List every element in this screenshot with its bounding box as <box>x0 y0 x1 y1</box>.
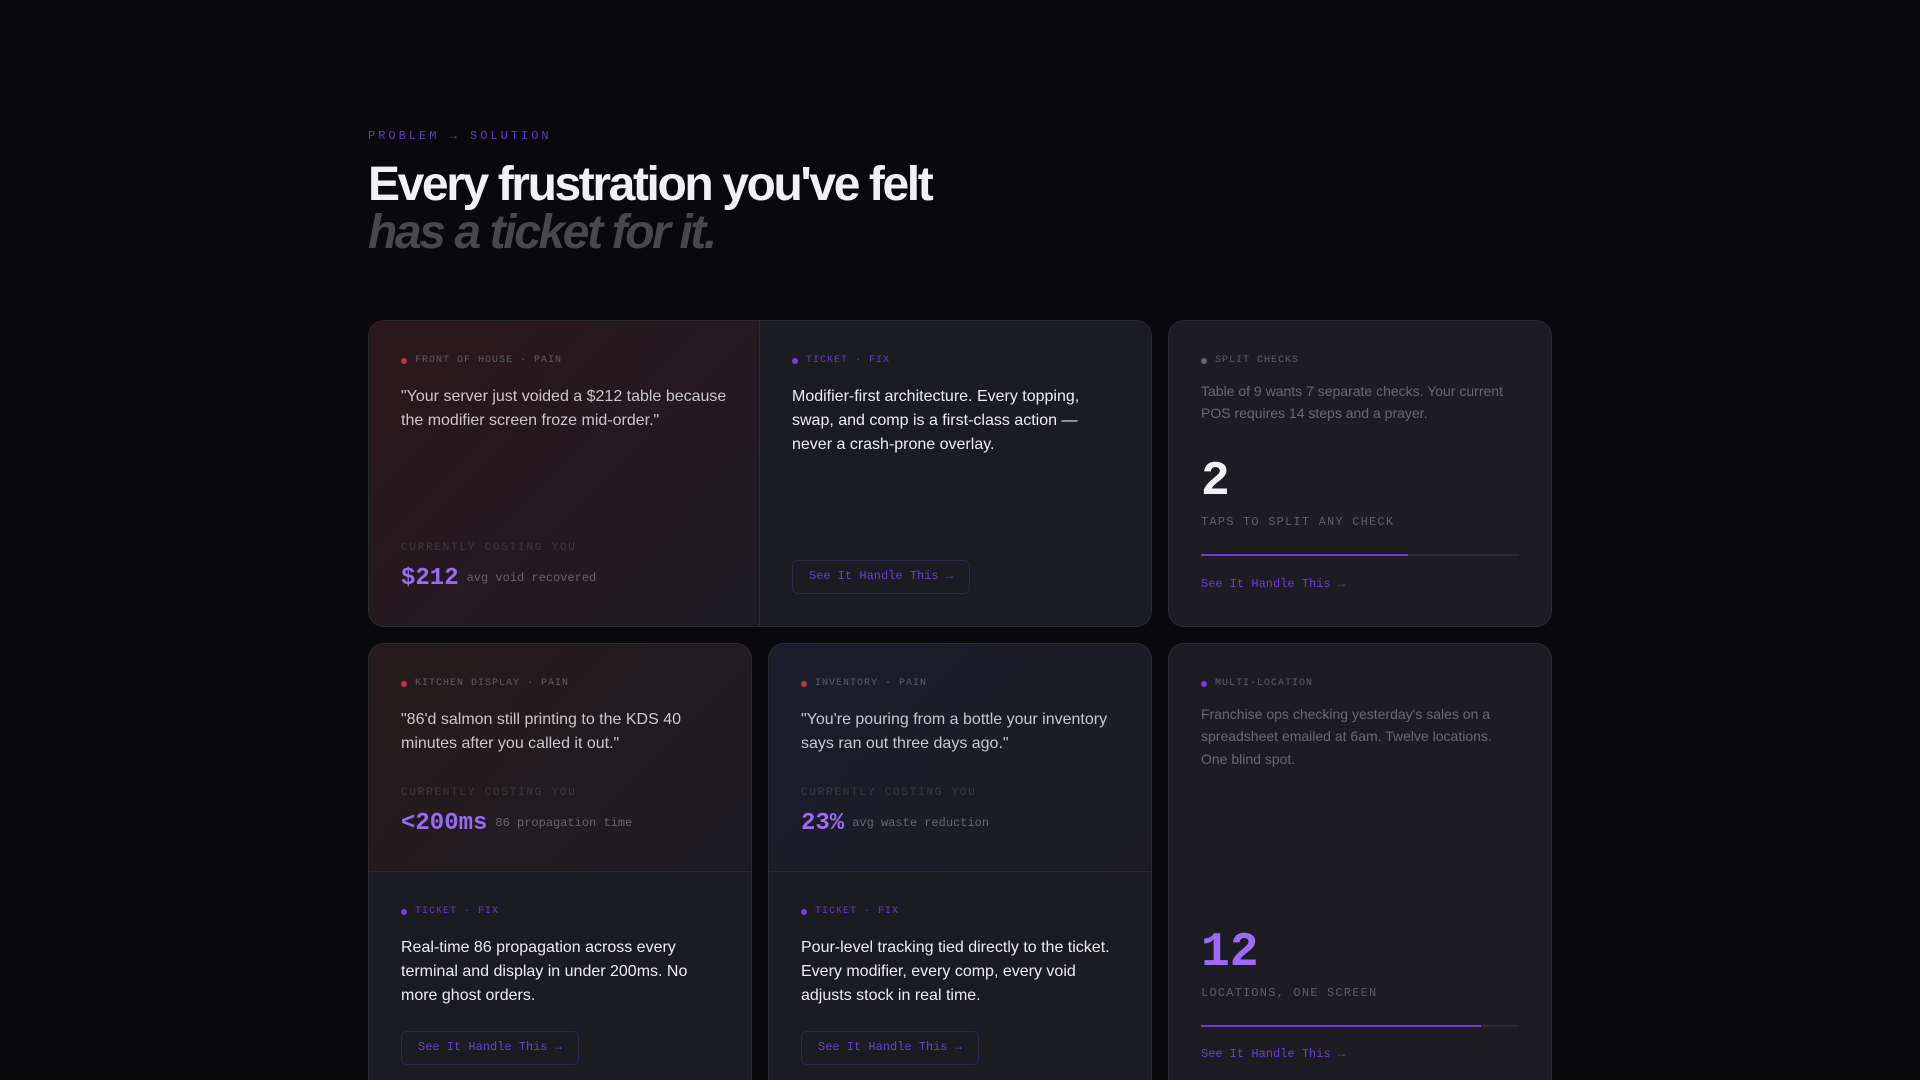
stat: 2 taps: 2 <box>1201 455 1230 509</box>
tag: split checks: SPLIT CHECKS <box>1215 355 1299 366</box>
fix description: Every modifier, every comp, every void <box>801 963 1076 980</box>
tag: ticket fix: TICKET · FIX <box>815 906 899 917</box>
multi-location description <box>1201 706 1492 767</box>
panel: modifier fix <box>760 321 1151 626</box>
stat: 23 percent <box>801 810 989 837</box>
cost caption: CURRENTLY COSTING YOU <box>801 787 977 799</box>
stat: 23 percent: avg waste reduction <box>852 816 989 830</box>
pain quote: "Your server just voided a $212 table because <box>401 388 726 405</box>
panel: front of house pain <box>369 321 760 626</box>
fix description: Pour-level tracking tied directly to the ticket. <box>801 939 1110 956</box>
card: split checks <box>1168 320 1552 627</box>
button: see it handle this: See It Handle This → <box>818 1040 962 1054</box>
eyebrow: problem to solution: PROBLEM → SOLUTION <box>368 128 552 142</box>
panel: inventory pain <box>769 644 1151 872</box>
fix description <box>801 939 1110 1004</box>
stat label: TAPS TO SPLIT ANY CHECK <box>1201 514 1394 528</box>
panel: kitchen fix <box>369 872 751 1080</box>
split checks description: Table of 9 wants 7 separate checks. Your current <box>1201 383 1503 399</box>
stat: $212: avg void recovered <box>467 571 596 585</box>
pain quote <box>401 388 726 429</box>
stat: under 200ms: <200ms <box>401 810 487 837</box>
fix description: Real-time 86 propagation across every <box>401 939 676 956</box>
stat: under 200ms: 86 propagation time <box>495 816 632 830</box>
fix description <box>792 388 1079 453</box>
pain quote: says ran out three days ago." <box>801 735 1009 752</box>
tag: ticket fix: TICKET · FIX <box>415 906 499 917</box>
pain quote: "86'd salmon still printing to the KDS 40 <box>401 711 681 728</box>
fix description: swap, and comp is a first-class action — <box>792 412 1077 429</box>
pain quote: "You're pouring from a bottle your inventory <box>801 711 1107 728</box>
title: Every frustration you've felt <box>368 158 931 211</box>
stat: $212 <box>401 565 596 592</box>
card: multi-location <box>1168 643 1552 1080</box>
fix description: terminal and display in under 200ms. No <box>401 963 687 980</box>
link: see it handle this: See It Handle This → <box>1201 1047 1345 1061</box>
cost caption: CURRENTLY COSTING YOU <box>401 542 577 554</box>
stat label: LOCATIONS, ONE SCREEN <box>1201 986 1377 1000</box>
tag: multi-location: MULTI-LOCATION <box>1215 678 1313 689</box>
panel: inventory fix <box>769 872 1151 1080</box>
split checks description: POS requires 14 steps and a prayer. <box>1201 405 1427 421</box>
button: see it handle this <box>792 560 970 594</box>
tag: kitchen display pain: KITCHEN DISPLAY · PAIN <box>415 678 569 689</box>
multi-location description: spreadsheet emailed at 6am. Twelve locations. <box>1201 728 1492 744</box>
pain quote: minutes after you called it out." <box>401 735 619 752</box>
button: see it handle this <box>401 1031 579 1065</box>
split checks description <box>1201 383 1503 421</box>
cost caption: CURRENTLY COSTING YOU <box>401 787 577 799</box>
card: kitchen display <box>368 643 752 1080</box>
button: see it handle this: See It Handle This → <box>809 569 953 583</box>
stat: 12 locations: 12 <box>1201 926 1259 980</box>
tag: inventory pain: INVENTORY · PAIN <box>815 678 927 689</box>
tag: front of house pain: FRONT OF HOUSE · PAIN <box>415 355 562 366</box>
pain quote: the modifier screen froze mid-order." <box>401 412 659 429</box>
progress bar: 65 percent <box>1201 554 1519 556</box>
fix description: Modifier-first architecture. Every topping, <box>792 388 1079 405</box>
card: inventory <box>768 643 1152 1080</box>
link: see it handle this: See It Handle This → <box>1201 577 1345 591</box>
button: see it handle this: See It Handle This → <box>418 1040 562 1054</box>
multi-location description: One blind spot. <box>1201 751 1295 767</box>
stat: under 200ms <box>401 810 632 837</box>
stat: 23 percent: 23% <box>801 810 844 837</box>
pain quote <box>401 711 681 752</box>
stat: $212: $212 <box>401 565 459 592</box>
button: see it handle this <box>801 1031 979 1065</box>
pain quote <box>801 711 1108 752</box>
panel: kitchen display pain <box>369 644 751 872</box>
fix description: more ghost orders. <box>401 987 535 1004</box>
title <box>368 158 934 259</box>
multi-location description: Franchise ops checking yesterday's sales on a <box>1201 706 1490 722</box>
card: front of house <box>368 320 1152 627</box>
fix description <box>401 939 687 1004</box>
fix description: never a crash-prone overlay. <box>792 436 994 453</box>
fix description: adjusts stock in real time. <box>801 987 981 1004</box>
progress bar: 88 percent <box>1201 1025 1519 1027</box>
title: has a ticket for it. <box>368 206 715 259</box>
tag: ticket fix: TICKET · FIX <box>806 355 890 366</box>
